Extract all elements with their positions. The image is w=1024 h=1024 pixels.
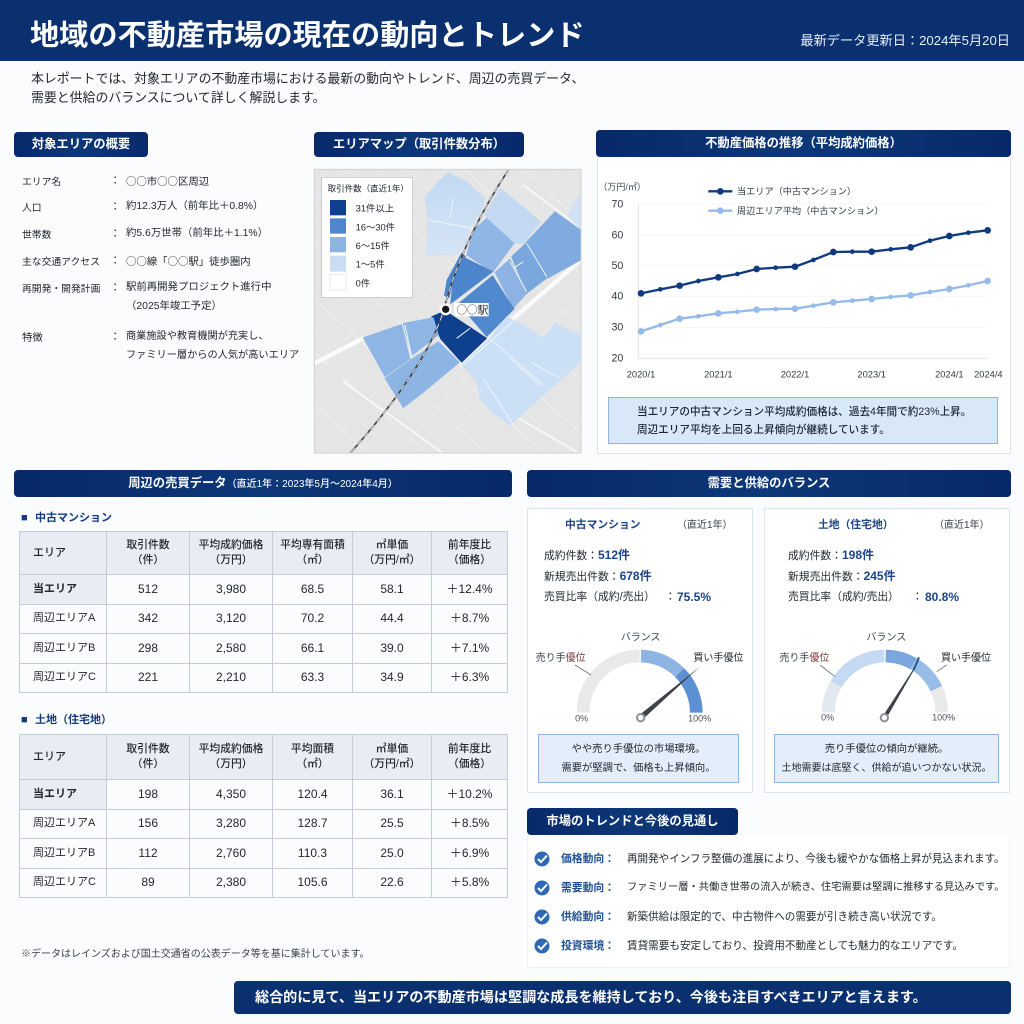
outlook item: price: 価格動向： [561, 853, 615, 865]
table: residential land: ＋10.2% [446, 787, 493, 801]
table: residential land: 22.6 [380, 875, 404, 889]
intro text [31, 71, 584, 104]
table: used condos: 342 [138, 611, 158, 625]
land stats: 新規売出件数：245件 [788, 568, 896, 582]
district: 6-15 west [363, 324, 410, 377]
table: residential land: 120.4 [297, 787, 328, 801]
table: residential land: 周辺エリアA [33, 817, 95, 829]
sub-heading: used condos: ■ [21, 512, 28, 524]
condo period: （直近1年） [677, 520, 733, 531]
table: residential land: 128.7 [297, 816, 328, 830]
outlook item: demand: 需要動向： [561, 882, 615, 894]
table: residential land: エリア [33, 750, 66, 762]
callout: price summary: 周辺エリア平均を上回る上昇傾向が継続しています。 [637, 424, 890, 436]
row: area name: ： [110, 176, 120, 187]
table: used condos: ＋12.4% [446, 582, 493, 596]
table: used condos: 298 [138, 641, 158, 655]
table: used condos: （価格） [448, 554, 491, 566]
check icon [534, 910, 550, 924]
check icon [534, 880, 550, 896]
row: features: 商業施設や教育機関が充実し、 [126, 331, 269, 342]
land period: （直近1年） [934, 520, 990, 531]
district: 6-15 far east [527, 212, 581, 278]
gauge: condo: 0% [575, 714, 588, 724]
table: residential land: 3,280 [216, 816, 246, 830]
table: used condos: （万円/㎡） [364, 554, 420, 566]
row: population: 約12.3万人（前年比＋0.8%） [126, 201, 263, 212]
row: redevelopment: （2025年竣工予定） [126, 301, 222, 312]
intro text: 需要と供給のバランスについて詳しく解説します。 [31, 90, 326, 104]
x axis labels [627, 369, 1003, 379]
table: used condos: ＋8.7% [450, 611, 489, 625]
outlook item: price [534, 852, 1005, 866]
text: 中古マンション [35, 512, 112, 524]
land note [774, 734, 999, 783]
heading: price trend: 不動産価格の推移（平均成約価格） [705, 136, 902, 150]
district: 1-5 north [425, 172, 485, 256]
map legend: 31件以上 [356, 203, 394, 214]
table: residential land: 4,350 [216, 787, 246, 801]
table: used condos: 前年度比 [448, 539, 491, 551]
heading: nearby sales data [14, 470, 512, 497]
district: 16-30 east [457, 276, 514, 337]
series: this area [638, 227, 991, 297]
gauge: condo: 買い手優位 [693, 651, 743, 664]
row: redevelopment [22, 281, 271, 312]
table: residential land: 156 [138, 816, 158, 830]
land stats: ： [912, 591, 923, 603]
table: residential land: 2,760 [216, 846, 246, 860]
x axis labels: 2021/1 [704, 369, 733, 379]
table: residential land: 89 [141, 875, 155, 889]
condo stats: 成約件数：512件 [544, 548, 630, 562]
table: used condos: 44.4 [380, 611, 404, 625]
table: residential land: 前年度比 [448, 743, 491, 755]
table: used condos [19, 531, 508, 693]
row: area name [22, 173, 209, 188]
x axis labels: 2022/1 [781, 369, 809, 379]
table: used condos: エリア [33, 546, 66, 558]
table: used condos: 平均専有面積 [280, 539, 345, 551]
panel: market outlook [527, 835, 1010, 968]
district: 1-5 northeast [485, 188, 541, 243]
outlook item: supply: 新築供給は限定的で、中古物件への需要が引き続き高い状況です。 [627, 911, 942, 923]
row: redevelopment: 駅前再開発プロジェクト進行中 [126, 282, 271, 293]
row: redevelopment: ： [110, 283, 120, 294]
title: 地域の不動産市場の現在の動向とトレンド [30, 20, 585, 52]
gauge: condo: バランス [621, 632, 661, 644]
heading: area map: エリアマップ（取引件数分布） [333, 137, 505, 151]
map legend: 16～30件 [356, 221, 395, 232]
map [314, 168, 582, 454]
row: population: 人口 [22, 203, 42, 214]
outlook item: price: 再開発やインフラ整備の進展により、今後も緩やかな価格上昇が見込まれます。 [627, 853, 1005, 865]
sub-heading: used condos [21, 512, 112, 524]
land stats [788, 548, 959, 604]
table: residential land: 25.0 [380, 846, 404, 860]
gauge: condo: 100% [688, 714, 711, 724]
railway line [350, 170, 508, 453]
condo note: やや売り手優位の市場環境。 [572, 744, 705, 755]
x axis labels: 2020/1 [627, 369, 655, 379]
table: used condos: 周辺エリアB [33, 642, 95, 654]
condo note: 需要が堅調で、価格も上昇傾向。 [561, 763, 716, 774]
row: transit [22, 253, 251, 268]
sub-heading: residential land [21, 714, 112, 726]
text: 土地（住宅地） [35, 714, 112, 726]
y axis labels: 70 [611, 198, 623, 210]
header band [0, 0, 1024, 61]
table: used condos: 取引件数 [126, 539, 170, 551]
table: residential land: ＋6.9% [450, 846, 489, 860]
table: residential land: 25.5 [380, 816, 404, 830]
condo stats [544, 548, 711, 604]
heading: market outlook: 市場のトレンドと今後の見通し [546, 814, 719, 828]
map legend: 6～15件 [356, 240, 390, 251]
table: used condos: 2,580 [216, 641, 246, 655]
callout: price summary [608, 397, 998, 444]
row: features [22, 330, 299, 361]
row: population: ： [110, 202, 120, 213]
table: used condos: 当エリア [33, 583, 77, 595]
outlook item: demand [534, 880, 1005, 896]
outlook item: investment: 賃貸需要も安定しており、投資用不動産としても魅力的なエリアです。 [627, 940, 963, 952]
callout: price summary: 当エリアの中古マンション平均成約価格は、過去4年間で約23%上昇。 [637, 406, 971, 418]
row: area name: ○○市○○区周辺 [126, 173, 209, 188]
gauge: land: 買い手優位 [941, 651, 991, 664]
table: used condos: 周辺エリアA [33, 612, 95, 624]
table: residential land: （件） [132, 758, 164, 770]
table: residential land: ＋5.8% [450, 875, 489, 889]
condo stats: 売買比率（成約/売出） [544, 591, 655, 603]
table: residential land: （万円） [209, 758, 253, 770]
table: residential land: 110.3 [298, 846, 327, 860]
conclusion banner: 総合的に見て、当エリアの不動産市場は堅調な成長を維持しており、今後も注目すべきエリアと言えます。 [255, 989, 927, 1005]
table: used condos: 58.1 [380, 582, 404, 596]
row: redevelopment: 再開発・開発計画 [22, 284, 100, 295]
table: residential land: ㎡単価 [376, 743, 408, 755]
line chart: （万円/㎡） [598, 182, 646, 192]
table: used condos: 周辺エリアC [33, 671, 96, 683]
table: residential land: 36.1 [380, 787, 404, 801]
gauge: land: バランス [866, 632, 906, 644]
gauge: land: 売り手優位 [779, 651, 829, 664]
table: used condos: 34.9 [380, 670, 404, 684]
outlook item: investment [534, 938, 963, 954]
table: residential land: 198 [138, 787, 158, 801]
x axis labels: 2023/1 [857, 369, 886, 379]
panel: area overview [22, 173, 299, 361]
map legend [322, 177, 413, 298]
row: households [22, 227, 268, 241]
table: used condos: （万円） [209, 554, 253, 566]
x axis labels: 2024/1 [935, 369, 964, 379]
row: transit: ○○線「○○駅」徒歩圏内 [126, 253, 251, 268]
district: 6-15 southwest [385, 342, 459, 408]
table: used condos: 2,210 [216, 670, 246, 684]
row: features: 特徴 [22, 333, 43, 344]
row: features: ファミリー層からの人気が高いエリア [126, 350, 299, 361]
heading: nearby sales data: 周辺の売買データ（直近1年：2023年5月～2024年4月） [128, 476, 398, 490]
table: residential land: 平均面積 [291, 743, 334, 755]
row: households: ： [110, 229, 120, 240]
table: residential land: 周辺エリアB [33, 847, 95, 859]
table: used condos: 3,980 [216, 582, 246, 596]
row: population [22, 200, 263, 214]
table: used condos: 221 [138, 670, 158, 684]
table: used condos: 平均成約価格 [199, 539, 263, 551]
condo stats: 75.5% [677, 590, 711, 604]
heading: supply demand balance [527, 470, 1011, 497]
table: residential land: 平均成約価格 [199, 743, 263, 755]
y axis labels: 20 [611, 353, 623, 365]
table: residential land: 105.6 [297, 875, 328, 889]
gauges [536, 632, 991, 724]
table: residential land: （㎡） [296, 758, 329, 770]
chart legend [708, 186, 884, 216]
table: residential land [19, 734, 508, 898]
update date: 最新データ更新日：2024年5月20日 [800, 33, 1010, 48]
district: 16-30 north [451, 257, 493, 304]
conclusion banner [234, 981, 1011, 1014]
series: surrounding average [638, 278, 991, 335]
panel: price chart [597, 157, 1011, 454]
district: 1-5 southeast [462, 317, 581, 425]
gauge: condo: 売り手優位 [536, 651, 586, 664]
intro text: 本レポートでは、対象エリアの不動産市場における最新の動向やトレンド、周辺の売買データ、 [31, 71, 584, 86]
y axis labels: 30 [611, 321, 623, 333]
outlook item: demand: ファミリー層・共働き世帯の流入が続き、住宅需要は堅調に推移する見込みです。 [627, 882, 1005, 893]
condo stats: ： [665, 591, 676, 603]
table: used condos: （㎡） [296, 554, 329, 566]
y axis labels: 60 [611, 229, 623, 241]
table: residential land: 当エリア [33, 788, 77, 800]
table: residential land: 取引件数 [126, 743, 170, 755]
district: 31+ station [432, 312, 487, 362]
check icon [534, 852, 550, 866]
land stats: 成約件数：198件 [788, 548, 874, 562]
table: used condos: 68.5 [301, 582, 324, 596]
table: used condos: ＋6.3% [450, 670, 489, 684]
y axis labels: 40 [611, 291, 623, 303]
sub-heading: residential land: ■ [21, 714, 28, 726]
outlook item: supply [534, 910, 942, 924]
heading: market outlook [527, 808, 738, 835]
line chart [598, 182, 1003, 379]
outlook item: investment: 投資環境： [561, 940, 615, 952]
table: used condos: 3,120 [216, 611, 246, 625]
table: used condos: 70.2 [301, 611, 324, 625]
y axis labels [611, 198, 623, 365]
table: used condos: （件） [132, 554, 164, 566]
condo note [538, 734, 739, 783]
table: used condos: 512 [138, 582, 158, 596]
heading: area overview: 対象エリアの概要 [32, 137, 130, 151]
chart legend: 当エリア（中古マンション） [737, 186, 856, 197]
land note: 土地需要は底堅く、供給が追いつかない状況。 [782, 763, 992, 774]
gauge: land: 100% [932, 713, 955, 723]
station marker: ○○駅 [456, 302, 489, 317]
station marker [440, 302, 489, 317]
land title: 土地（住宅地） [818, 519, 894, 531]
table: residential land: 2,380 [216, 875, 246, 889]
gauge: condo [536, 632, 743, 724]
table: residential land: （価格） [448, 758, 491, 770]
district: 6-15 east lower [495, 259, 527, 308]
row: area name: エリア名 [22, 177, 61, 188]
y axis labels: 50 [611, 260, 623, 272]
map legend: 1～5件 [356, 259, 385, 270]
x axis labels: 2024/4 [974, 369, 1003, 379]
map legend: 取引件数（直近1年） [328, 184, 409, 194]
table: used condos: ＋7.1% [450, 641, 489, 655]
footnote: ※データはレインズおよび国土交通省の公表データ等を基に集計しています。 [21, 949, 370, 960]
outlook item: supply: 供給動向： [561, 911, 615, 923]
table: used condos: 63.3 [301, 670, 324, 684]
heading: area overview [14, 132, 148, 157]
table: residential land: 112 [138, 846, 158, 860]
condo stats: 新規売出件数：678件 [544, 568, 652, 582]
row: households: 世帯数 [22, 230, 51, 241]
heading: price trend [596, 130, 1011, 157]
map legend: 0件 [356, 277, 370, 288]
district: 6-15 north [467, 218, 514, 272]
district: 6-15 east [512, 242, 547, 293]
land note: 売り手優位の傾向が継続。 [825, 744, 948, 755]
gauge: land: 0% [821, 713, 834, 723]
district: far east corner [567, 193, 581, 230]
land stats: 売買比率（成約/売出） [788, 591, 899, 603]
table: used condos: ㎡単価 [376, 539, 408, 551]
row: features: ： [110, 332, 120, 343]
table: used condos: 39.0 [380, 641, 404, 655]
heading: area map [314, 132, 524, 157]
table: used condos: 66.1 [301, 641, 324, 655]
row: transit: 主な交通アクセス [22, 257, 100, 268]
row: transit: ： [110, 256, 120, 267]
table: residential land: ＋8.5% [450, 816, 489, 830]
gauge: land [779, 632, 991, 723]
table: residential land: 周辺エリアC [33, 876, 96, 888]
table: residential land: （万円/㎡） [364, 758, 420, 770]
chart legend: 周辺エリア平均（中古マンション） [737, 205, 884, 216]
land stats: 80.8% [925, 590, 959, 604]
check icon [534, 938, 550, 954]
panel: land balance [764, 508, 1010, 793]
condo title: 中古マンション [565, 519, 641, 531]
panel: condo balance [527, 508, 753, 793]
row: households: 約5.6万世帯（前年比＋1.1%） [126, 228, 268, 239]
heading: supply demand balance: 需要と供給のバランス [708, 476, 830, 490]
